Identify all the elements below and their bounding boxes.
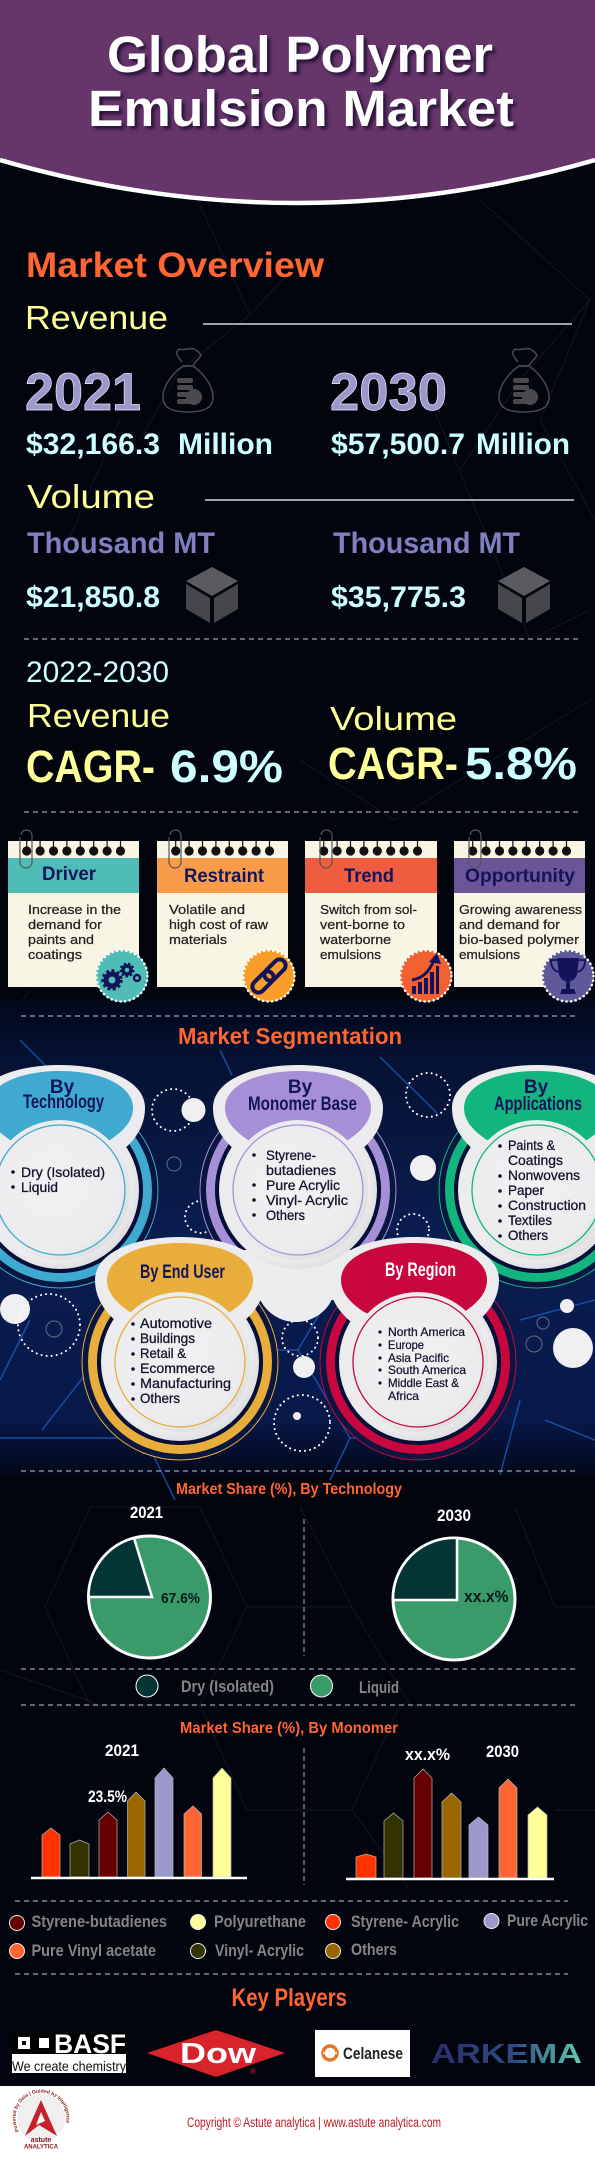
copyright: Copyright © Astute analytica | www.astute analytica.com (187, 2115, 441, 2130)
cagr volume: 5.8% (465, 738, 577, 789)
logo: BASF (12, 2029, 126, 2074)
logo: Dow: Dow (180, 2038, 257, 2070)
bar value 23.5%: 23.5% (88, 1787, 127, 1806)
legend: monomer: Styrene-butadienes (32, 1912, 167, 1931)
driver text: Increase in the (28, 902, 121, 917)
panel: restraint (157, 830, 295, 1002)
applications list: Paper (508, 1182, 544, 1198)
opportunity text (459, 902, 583, 962)
icon: chain link (243, 950, 295, 1002)
monomer list: Styrene- (266, 1147, 316, 1163)
trend text: waterborne (319, 932, 391, 947)
forecast period: 2022-2030 (26, 656, 169, 689)
logo: BASF: We create chemistry (12, 2058, 126, 2074)
opportunity text: bio-based polymer (459, 932, 580, 947)
technology heading (23, 1077, 104, 1113)
header banner (0, 0, 595, 203)
legend: technology: Liquid (359, 1678, 399, 1697)
trend text: vent-borne to (320, 917, 405, 932)
footer logo: ANALYTICA (24, 2144, 59, 2150)
region list: Asia Pacific (388, 1351, 449, 1365)
icon: growth chart (400, 950, 452, 1002)
applications heading (494, 1077, 582, 1115)
panel: by monomer base (200, 1065, 396, 1322)
restraint heading: Restraint (184, 866, 265, 887)
panel: by applications (439, 1065, 595, 1288)
revenue value 2021: $32,166.3 (26, 428, 160, 461)
revenue value 2030 (331, 428, 570, 461)
title (88, 26, 514, 137)
year 2021: 2021 (25, 363, 141, 422)
trend heading: Trend (344, 866, 394, 887)
legend: monomer: Styrene- Acrylic (351, 1912, 459, 1931)
applications heading: By (524, 1077, 549, 1098)
region list: Africa (388, 1389, 419, 1403)
year 2030: 2030 (330, 363, 447, 422)
revenue value 2030: Million (476, 428, 570, 461)
technology list: Liquid (21, 1179, 58, 1195)
decorative circles (0, 1073, 593, 1451)
volume unit right: Thousand MT (333, 527, 520, 560)
pie value xx.x%: xx.x% (464, 1587, 508, 1606)
segmentation network lines (0, 1040, 595, 1500)
footer logo: astute (31, 2137, 51, 2144)
segmentation background (0, 1000, 595, 1475)
region list: North America (388, 1325, 465, 1339)
cagr revenue label: Revenue (27, 697, 170, 734)
pie value 67.6%: 67.6% (161, 1590, 200, 1607)
region list: Middle East & (388, 1376, 459, 1390)
legend: monomer: Vinyl- Acrylic (215, 1941, 304, 1960)
technology list: Dry (Isolated) (21, 1164, 105, 1180)
end user list: Retail & (140, 1345, 187, 1361)
icon: cube right (498, 567, 550, 623)
label 2021: 2021 (105, 1741, 139, 1760)
volume unit left: Thousand MT (27, 527, 215, 560)
logo: Dow (147, 2030, 285, 2077)
pie chart 2021 (88, 1536, 210, 1658)
applications list: Nonwovens (508, 1167, 580, 1183)
bar value xx.x%: xx.x% (405, 1745, 450, 1764)
driver text: paints and (28, 932, 94, 947)
opportunity text: emulsions (459, 947, 521, 962)
region heading: By Region (385, 1260, 456, 1281)
volume value 2030: $35,775.3 (331, 581, 466, 614)
logo: Dow: ® (250, 2067, 256, 2076)
icon: trophy (542, 950, 594, 1002)
legend: technology: Dry (Isolated) (181, 1677, 274, 1696)
opportunity text: and demand for (459, 917, 561, 932)
footer logo: Powered by Data | Guided by Intelligence (12, 2089, 70, 2132)
footer (0, 2086, 595, 2157)
label 2030: 2030 (486, 1742, 519, 1761)
applications list: Construction (508, 1197, 586, 1213)
volume value 2021: $21,850.8 (26, 581, 160, 614)
cagr revenue: 6.9% (170, 741, 283, 792)
region list: Europe (388, 1338, 424, 1352)
opportunity heading: Opportunity (465, 866, 575, 887)
monomer heading: By (288, 1077, 313, 1098)
driver heading: Driver (42, 864, 97, 885)
label 2030: 2030 (437, 1506, 471, 1525)
panel: trend (305, 830, 452, 1002)
title: Global Polymer (107, 26, 493, 83)
heading: volume: Volume (27, 478, 155, 515)
end user list: Others (140, 1390, 180, 1406)
logo: Celanese: Celanese (343, 2044, 403, 2063)
heading: market overview: Market Overview (26, 246, 325, 285)
driver text (28, 902, 121, 962)
revenue value 2021 (26, 428, 273, 461)
opportunity text: Growing awareness (459, 902, 583, 917)
region list (378, 1325, 466, 1403)
logo: Celanese (315, 2030, 410, 2077)
panel: driver (8, 830, 148, 1002)
monomer list: Others (266, 1207, 305, 1223)
panel: by region (320, 1237, 516, 1460)
bar chart 2021 (31, 1768, 247, 1878)
label 2021: 2021 (130, 1503, 163, 1522)
icon: money bag 2021 (163, 348, 213, 412)
heading: market share by technology: Market Share (%), By Technology (176, 1481, 402, 1498)
panel: by technology (0, 1065, 158, 1288)
applications list (498, 1137, 586, 1243)
legend: monomer: Polyurethane (214, 1912, 306, 1931)
monomer list: butadienes (266, 1162, 336, 1178)
cagr revenue (26, 741, 283, 792)
trend text (319, 902, 417, 962)
panel: by end user (82, 1237, 278, 1460)
heading: market share by monomer: Market Share (%), By Monomer (180, 1720, 398, 1737)
monomer list: Vinyl- Acrylic (266, 1192, 348, 1208)
heading: key players: Key Players (232, 1984, 347, 2012)
trend text: Switch from sol- (320, 902, 417, 917)
restraint text: high cost of raw (169, 917, 269, 932)
end user list: Manufacturing (140, 1375, 231, 1391)
legend: monomer (10, 1911, 588, 1960)
cagr volume: CAGR- (328, 738, 458, 789)
end user list: Buildings (140, 1330, 195, 1346)
title: Emulsion Market (88, 80, 514, 137)
trend text: emulsions (320, 947, 382, 962)
footer logo (12, 2089, 70, 2150)
applications list: Textiles (508, 1212, 552, 1228)
cagr volume (328, 738, 577, 789)
background network pattern (0, 200, 595, 1890)
legend: technology (136, 1675, 399, 1697)
technology heading: Technology (23, 1092, 104, 1113)
monomer heading (248, 1077, 357, 1115)
logo: Arkema: ARKEMA (431, 2038, 582, 2069)
end user list (131, 1315, 231, 1406)
restraint text: Volatile and (169, 902, 245, 917)
applications list: Coatings (508, 1152, 563, 1168)
technology list (11, 1164, 105, 1195)
cagr volume label: Volume (330, 700, 457, 737)
logo: BASF: BASF (54, 2029, 126, 2059)
panel: opportunity (454, 830, 594, 1002)
monomer heading: Monomer Base (248, 1094, 357, 1115)
end user list: Automotive (140, 1315, 212, 1331)
end user list: Ecommerce (140, 1360, 215, 1376)
revenue value 2030: $57,500.7 (331, 428, 465, 461)
end user heading: By End User (140, 1262, 225, 1283)
monomer list: Pure Acrylic (266, 1177, 340, 1193)
driver text: demand for (28, 917, 103, 932)
applications list: Paints & (508, 1137, 556, 1153)
restraint text (169, 902, 269, 947)
driver text: coatings (28, 947, 83, 962)
legend: monomer: Others (351, 1940, 397, 1959)
bar chart 2030 (346, 1745, 554, 1879)
region list: South America (388, 1363, 466, 1377)
icon: cube left (186, 567, 238, 623)
revenue value 2021: Million (178, 428, 273, 461)
applications list: Others (508, 1227, 548, 1243)
technology heading: By (50, 1077, 75, 1098)
icon: gears (96, 950, 148, 1002)
monomer list (252, 1147, 348, 1223)
heading: revenue: Revenue (25, 299, 168, 336)
restraint text: materials (169, 932, 228, 947)
heading: market segmentation: Market Segmentation (178, 1023, 402, 1049)
pie chart 2030 (393, 1538, 515, 1660)
cagr revenue: CAGR- (26, 741, 155, 792)
icon: money bag 2030 (499, 348, 549, 412)
legend: monomer: Pure Vinyl acetate (32, 1941, 156, 1960)
